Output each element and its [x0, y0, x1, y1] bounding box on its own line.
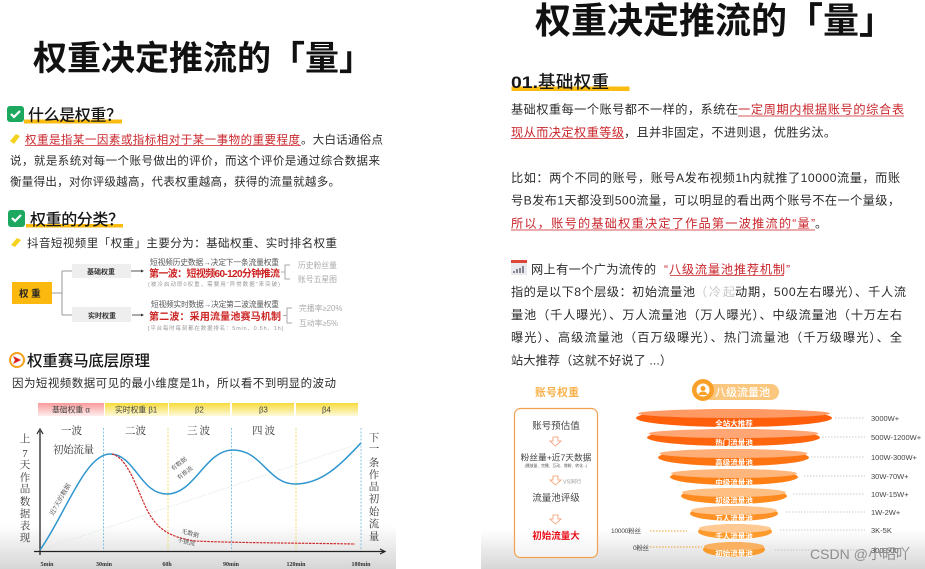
x axis labels: 120min: [286, 562, 306, 568]
curve annotations: 近7天的数据: [47, 481, 73, 517]
left vertical label: 品: [20, 483, 30, 495]
icon: orange arrow badge: [10, 353, 24, 367]
paragraph one: ，且并非固定，不进则退，优胜劣汰。: [624, 124, 836, 140]
traffic values: 300-500: [871, 546, 899, 555]
wave two text: [148, 299, 283, 332]
paragraph one: [511, 102, 904, 140]
phase bands: β2: [195, 406, 204, 414]
axes: [34, 429, 385, 555]
paragraph one: 现从而决定权重等级: [511, 124, 624, 140]
x axis labels: [40, 562, 371, 568]
follower markers: [611, 526, 702, 552]
paragraph two: 比如：两个不同的账号，账号A发布视频1h内就推了10000流量，而账: [511, 170, 900, 185]
title: left page: 权重决定推流的「量」: [33, 40, 373, 78]
traffic values: 30W-70W+: [871, 472, 909, 481]
flow arrows: [550, 437, 561, 524]
left vertical label: 现: [20, 532, 31, 544]
blue curve: [40, 443, 361, 550]
traffic values: 100W-300W+: [871, 453, 918, 462]
left vertical label: 天: [20, 459, 31, 471]
left vertical label: [20, 432, 31, 544]
follower markers: 10000粉丝: [611, 526, 642, 535]
layer names: [715, 418, 753, 558]
traffic values: 3000W+: [871, 414, 900, 423]
arrows: [131, 270, 144, 316]
watermark: CSDN @小昭吖: [810, 546, 910, 562]
wave labels: [53, 424, 276, 456]
wave two text: 短视频实时数据→决定第二波流量权重: [151, 299, 279, 309]
body text: 说，就是系统对每一个账号做出的评价，而这个评价是通过综合数据来: [10, 154, 380, 168]
x axis labels: 5min: [40, 562, 54, 568]
x axis labels: 180min: [351, 562, 371, 568]
layer names: 热门流量池: [715, 437, 753, 447]
right vertical label: 作: [369, 468, 380, 481]
left vertical label: 上: [20, 432, 31, 445]
left vertical label: 数: [20, 495, 31, 508]
heading: 权重的分类？: [30, 211, 124, 229]
section: eight-level mechanism text: 站大推荐（这就不好说了 ...）: [511, 352, 672, 368]
paragraph two: 所以，账号的基础权重决定了作品第一波推流的“量”: [511, 216, 815, 230]
root box: 权 重: [19, 288, 41, 300]
heading highlight: [24, 120, 122, 124]
side metrics: 互动率≥5%: [299, 318, 338, 328]
layer names: 初始流量池: [715, 548, 753, 558]
paragraph one: 基础权重每一个账号都不一样的，系统在: [511, 102, 738, 116]
section: eight-level mechanism text: 指的是以下8个层级：初始流量池: [511, 284, 695, 299]
section: what is weight: [7, 106, 383, 188]
wave labels: 初始流量: [53, 443, 94, 456]
box: base weight: 基础权重: [87, 267, 115, 276]
layer names: 万人流量池: [715, 513, 753, 523]
underlined definition: 权重是指某一因素或指标相对于某一事物的重要程度: [25, 132, 300, 146]
x axis labels: 30min: [96, 562, 113, 568]
panel: account weight: VS同行: [563, 478, 582, 486]
flow box: [514, 408, 598, 558]
right vertical label: [369, 432, 380, 543]
section: eight-level mechanism text: 网上有一个广为流传的: [531, 262, 656, 276]
curve annotations: 不推流: [177, 536, 196, 548]
paragraph two: [511, 170, 900, 230]
wave labels: 一波: [61, 424, 82, 437]
right vertical label: 始: [369, 505, 380, 518]
right vertical label: 品: [369, 481, 379, 493]
panel: account weight: 初始流量大: [532, 530, 580, 542]
panel: account weight: 粉丝量+近7天数据: [521, 452, 592, 462]
side metrics: 账号五星图: [298, 275, 337, 284]
paragraph two: 号B发布1天都没到500流量，可以明显的看出两个账号不在一个量级，: [511, 192, 900, 208]
phase bands: β3: [259, 406, 268, 414]
phase bands: [38, 403, 358, 416]
heading highlight: [26, 224, 123, 228]
layer names: 初级流量池: [715, 495, 753, 505]
panel: account weight: [514, 385, 598, 558]
icon: green check: [7, 106, 24, 122]
follower markers: 0粉丝: [633, 543, 650, 552]
section: eight-level mechanism text: 动期，500左右曝光）、千人流: [735, 284, 906, 299]
section: eight-level mechanism text: 量池（千人曝光）、万人流量池（万人曝光）、中级流量池（十万左右: [511, 307, 902, 322]
panel: account weight: (播放量、完播、互动、增粉、转化...): [525, 463, 588, 468]
side metrics: 历史粉丝量: [298, 260, 337, 270]
box: realtime weight: 实时权重: [88, 311, 116, 320]
section: eight-level mechanism text: （冷起: [695, 285, 735, 299]
right vertical label: 一: [369, 444, 380, 455]
paragraph one: 一定周期内根据账号的综合表: [738, 102, 904, 116]
wave labels: 四 波: [252, 424, 276, 437]
badge: 八级流量池: [715, 385, 770, 399]
funnel: eight-level traffic pool: [611, 379, 922, 558]
left vertical label: 7: [22, 449, 28, 460]
wave one text: (被冷启动即0权重，需要用“异常数据”来突破): [148, 280, 280, 288]
right vertical label: 条: [369, 456, 380, 469]
side metrics: [281, 260, 342, 328]
chart: traffic waves: [20, 403, 385, 568]
layer names: 全站大推荐: [715, 418, 753, 428]
icon: yellow tag: [10, 134, 20, 144]
heading: 01.: [511, 73, 538, 92]
wave labels: 二波: [125, 424, 146, 437]
heading: 账号权重: [535, 385, 579, 399]
wave two text: 第二波：采用流量池赛马机制: [149, 310, 281, 323]
curve annotations: 无数据: [180, 527, 200, 540]
body text: 因为短视频数据可见的最小维度是1h，所以看不到明显的波动: [12, 376, 336, 390]
traffic values: 10W-15W+: [871, 490, 909, 499]
box: realtime weight: [72, 307, 131, 322]
title: right page: 权重决定推流的「量」: [535, 0, 895, 41]
panel: account weight: 账号预估值: [532, 420, 580, 432]
section: classification of weight: [8, 210, 337, 250]
x axis labels: 60h: [162, 562, 172, 568]
phase bands: 基础权重 α: [52, 404, 90, 414]
traffic values: 3K-5K: [871, 526, 892, 535]
heading: 权重赛马底层原理: [27, 351, 150, 370]
body text: 。大白话通俗点: [301, 132, 383, 146]
heading: 什么是权重？: [28, 106, 122, 124]
panel: right page background shade: [481, 530, 925, 569]
badge: [692, 379, 779, 401]
root box: [12, 282, 52, 304]
section: base weight: [511, 72, 904, 230]
traffic values: [871, 414, 922, 555]
right vertical label: 初: [369, 492, 380, 505]
right vertical label: 流: [369, 517, 380, 530]
box: base weight: [72, 264, 131, 278]
curve annotations: 有推流: [175, 464, 194, 482]
heading highlight: [512, 86, 630, 91]
section: eight-level mechanism text: “八级流量池推荐机制”: [664, 262, 790, 276]
phase bands: 实时权重 β1: [115, 404, 157, 414]
left vertical label: 据: [20, 507, 31, 520]
traffic values: 1W-2W+: [871, 508, 901, 517]
intro text: 抖音短视频里「权重」主要分为：基础权重、实时排名权重: [27, 236, 337, 250]
panel: account weight: 流量池评级: [532, 492, 580, 504]
body text: [10, 132, 383, 188]
section: race principle: [10, 351, 336, 390]
x axis labels: 90min: [223, 562, 240, 568]
wave one text: 第一波：短视频60-120分钟推流: [149, 267, 280, 280]
phase bands: β4: [322, 406, 331, 414]
icon: bar chart calendar: [511, 260, 527, 275]
heading: 基础权重: [538, 72, 609, 92]
wave one text: [148, 257, 280, 288]
left vertical label: 表: [20, 519, 31, 532]
wave one text: 短视频历史数据→决定下一条流量权重: [150, 257, 279, 267]
traffic values: 500W-1200W+: [871, 433, 922, 442]
layer names: 千人流量池: [715, 531, 753, 541]
wave two text: [平台每时每刻都在数据排名：5min、0.5h、1h]: [148, 324, 283, 332]
red dashed curve: [112, 454, 355, 544]
layer names: 中级流量池: [715, 477, 753, 487]
diagram: weight tree: [12, 257, 342, 332]
paragraph two: 。: [815, 216, 827, 230]
curve annotations: 有数据: [169, 455, 188, 473]
section: eight-level mechanism text: [511, 260, 906, 368]
panel: left page background shade: [0, 525, 396, 569]
wave labels: 三 波: [187, 424, 210, 437]
right vertical label: 下: [369, 432, 380, 444]
leader lines: [775, 418, 865, 550]
icon: green check: [8, 210, 25, 227]
body text: 衡量得出，对你评级越高，代表权重越高，获得的流量就越多。: [10, 174, 340, 188]
layer names: 高级流量池: [715, 457, 753, 467]
layers: [636, 409, 832, 557]
left vertical label: 作: [20, 471, 31, 484]
icon: yellow tag: [11, 238, 21, 247]
section: eight-level mechanism text: 曝光）、高级流量池（百万级曝光）、热门流量池（千万级曝光）、全: [511, 330, 902, 344]
right vertical label: 量: [369, 531, 379, 543]
side metrics: 完播率≥20%: [299, 303, 342, 313]
curve annotations: [47, 455, 200, 548]
